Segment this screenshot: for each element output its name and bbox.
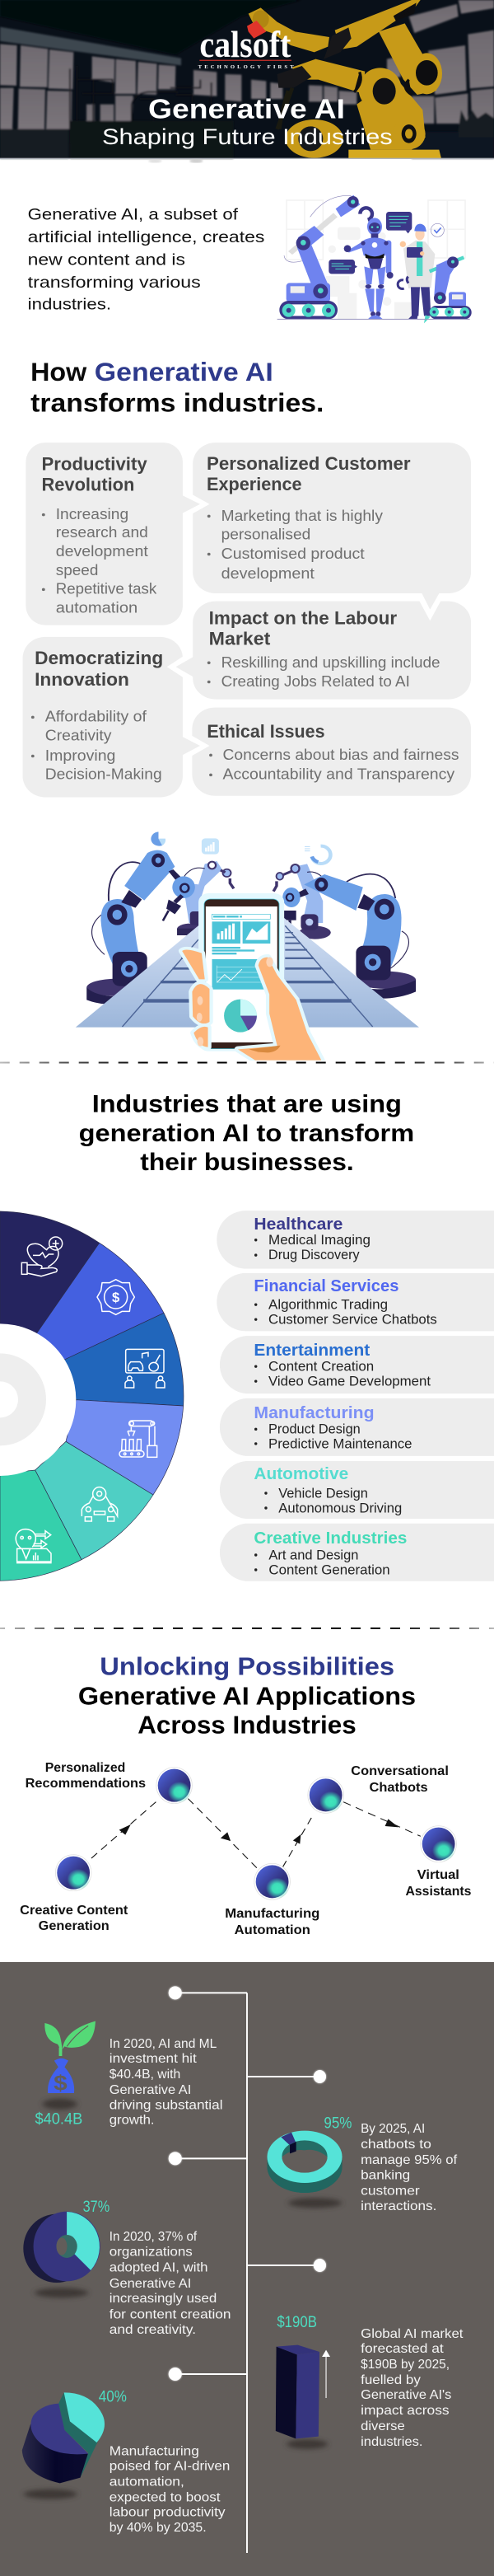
- stat: adoption 37%: In 2020, 37% of: [110, 2228, 197, 2244]
- panel: personalized customer experience: Customised product: [221, 546, 365, 563]
- section heading: [30, 358, 324, 417]
- panel: productivity revolution: development: [56, 543, 148, 560]
- stat: adoption 37%: [23, 2198, 231, 2337]
- stat: manufacturing 40%: 40%: [99, 2388, 127, 2405]
- card: entertainment: Entertainment: [254, 1342, 370, 1360]
- card: entertainment: Content Creation: [268, 1359, 374, 1375]
- card: entertainment: Video Game Development: [268, 1374, 431, 1389]
- stat: market 190B: fuelled by: [361, 2372, 421, 2387]
- card: automotive: Vehicle Design: [278, 1485, 368, 1501]
- factory windows background: [0, 0, 494, 158]
- section heading: industries: Industries that are using: [92, 1089, 402, 1117]
- node labels: Assistants: [405, 1885, 471, 1899]
- statistics timeline: [22, 1986, 464, 2553]
- dashed arrows: [91, 1799, 421, 1868]
- card: financial services: [217, 1273, 494, 1331]
- card: financial services: Financial Services: [254, 1277, 398, 1295]
- node labels: Automation: [235, 1923, 310, 1937]
- section heading: industries: generation AI to transform: [79, 1119, 414, 1146]
- panel: productivity revolution: speed: [56, 561, 98, 579]
- panel: personalized customer experience: Marketing that is highly: [221, 508, 383, 525]
- panel: impact on the labour market: [193, 592, 471, 700]
- intro text: artificial intelligence, creates: [28, 228, 264, 246]
- card: automotive: Automotive: [254, 1465, 348, 1483]
- floating chart icons: [151, 831, 330, 864]
- section heading: Generative AI: [95, 358, 273, 386]
- section heading: Generative AI Applications: [78, 1682, 416, 1711]
- left tank robot arm: [279, 195, 360, 319]
- panel: productivity revolution: Increasing: [56, 506, 128, 523]
- big left robot arm: [86, 850, 195, 1005]
- icon: heart in hand: [21, 1237, 63, 1276]
- card: financial services: Algorithmic Trading: [268, 1297, 388, 1313]
- speech bubbles: [329, 212, 412, 274]
- stat: chatbots 95%: chatbots to: [361, 2136, 431, 2152]
- stat: chatbots 95%: By 2025, AI: [361, 2120, 425, 2136]
- node labels: Recommendations: [26, 1777, 146, 1791]
- section heading: transforms industries.: [30, 388, 324, 417]
- node labels: [20, 1761, 471, 1937]
- stat: market 190B: forecasted at: [361, 2340, 444, 2356]
- card: creative industries: [220, 1524, 494, 1581]
- card: manufacturing: Manufacturing: [254, 1404, 375, 1422]
- stat: market 190B: [276, 2313, 464, 2449]
- panel: ethical issues: Accountability and Transparency: [223, 766, 454, 784]
- stat: market 190B: industries.: [361, 2433, 423, 2449]
- panel: democratizing innovation: Improving: [45, 747, 115, 765]
- icon: entertainment screen: [125, 1349, 165, 1388]
- panel: personalized customer experience: Personalized Customer: [207, 453, 411, 474]
- stat: adoption 37%: increasingly used: [110, 2290, 217, 2306]
- panel: productivity revolution: [26, 443, 183, 625]
- stat: adoption 37%: adopted AI, with: [110, 2260, 208, 2274]
- stat: manufacturing 40%: [22, 2388, 230, 2535]
- card: manufacturing: Predictive Maintenance: [268, 1436, 412, 1451]
- card: entertainment: [220, 1336, 494, 1393]
- card: healthcare: [217, 1211, 494, 1269]
- stat: adoption 37%: organizations: [110, 2244, 193, 2259]
- stat: manufacturing 40%: poised for AI-driven: [110, 2457, 230, 2473]
- panel: impact on the labour market: Impact on the Labour: [209, 607, 397, 628]
- icon: robot production line: [119, 1421, 157, 1457]
- stat: investment 40.4B: investment hit: [110, 2050, 197, 2066]
- stat: chatbots 95%: 95%: [324, 2115, 352, 2132]
- right tank robot arm: [430, 256, 472, 319]
- industry wheel: [0, 1211, 184, 1581]
- panel: democratizing innovation: Creativity: [45, 727, 112, 744]
- card: financial services: Customer Service Chatbots: [268, 1312, 437, 1328]
- stat: investment 40.4B: driving substantial: [110, 2096, 223, 2112]
- stat: manufacturing 40%: Manufacturing: [110, 2443, 199, 2458]
- big right robot arm: [282, 874, 416, 999]
- section: how generative AI transforms industries: [23, 358, 471, 797]
- intro text: transforming various: [28, 274, 201, 292]
- stat: investment 40.4B: In 2020, AI and ML: [110, 2035, 217, 2051]
- node labels: Creative Content: [20, 1904, 128, 1918]
- statistics panel background: [0, 1962, 494, 2576]
- stat: chatbots 95%: manage 95% of: [361, 2152, 457, 2167]
- stat: adoption 37%: for content creation: [110, 2306, 231, 2321]
- stat: chatbots 95%: customer: [361, 2182, 420, 2198]
- card: healthcare: Drug Discovery: [268, 1247, 360, 1262]
- calsoft logo: calsoft: [199, 23, 291, 65]
- section: generative AI applications: [20, 1652, 471, 1937]
- card: creative industries: Art and Design: [268, 1547, 358, 1562]
- section heading: Across Industries: [137, 1711, 357, 1740]
- panel: ethical issues: Ethical Issues: [207, 721, 325, 742]
- stat: chatbots 95%: [267, 2115, 457, 2213]
- stat: investment 40.4B: growth.: [110, 2112, 154, 2127]
- stat: adoption 37%: 37%: [83, 2198, 110, 2216]
- smartphone with dashboard: [198, 893, 284, 1051]
- back robot arms: [177, 861, 331, 939]
- panel: productivity revolution: automation: [56, 599, 137, 616]
- node labels: Conversational: [351, 1764, 449, 1778]
- engineer: [400, 223, 444, 323]
- stat: investment 40.4B: $40.4B: [35, 2110, 82, 2128]
- node: virtual assistants: [421, 1826, 456, 1862]
- node: conversational chatbots: [308, 1777, 343, 1813]
- card: manufacturing: [220, 1398, 494, 1456]
- calsoft logo: TECHNOLOGY FIRST: [198, 64, 294, 70]
- stat: chatbots 95%: interactions.: [361, 2198, 436, 2213]
- holding hand: [182, 949, 321, 1061]
- panel: impact on the labour market: Reskilling and upskilling include: [221, 654, 440, 672]
- panel: personalized customer experience: personalised: [221, 526, 310, 543]
- section heading: Unlocking Possibilities: [100, 1652, 394, 1681]
- stat: market 190B: $190B by 2025,: [361, 2356, 450, 2372]
- card: healthcare: Medical Imaging: [268, 1232, 370, 1248]
- factory and smartphone illustration: [0, 831, 494, 1175]
- panel: personalized customer experience: [181, 443, 471, 593]
- section heading: How: [30, 358, 87, 386]
- icon: dollar gear: $: [112, 1290, 120, 1305]
- robot and engineer illustration: [277, 195, 472, 323]
- icon: car and gear: [82, 1487, 118, 1521]
- stat: investment 40.4B: $: [54, 2071, 68, 2095]
- panel: personalized customer experience: development: [221, 565, 315, 583]
- panel: personalized customer experience: Experience: [207, 474, 302, 494]
- card: creative industries: Content Generation: [268, 1562, 390, 1577]
- panel: democratizing innovation: Innovation: [35, 669, 129, 690]
- panel: productivity revolution: Repetitive task: [56, 580, 156, 598]
- stat: manufacturing 40%: expected to boost: [110, 2489, 221, 2504]
- card: manufacturing: Product Design: [268, 1421, 361, 1436]
- stat: market 190B: impact across: [361, 2402, 450, 2418]
- stat: market 190B: Global AI market: [361, 2325, 464, 2341]
- card: creative industries: Creative Industries: [254, 1529, 407, 1548]
- stat: investment 40.4B: [35, 2021, 223, 2128]
- industry list cards: [217, 1211, 494, 1581]
- panel: productivity revolution: research and: [56, 524, 148, 541]
- intro text: industries.: [28, 296, 111, 313]
- stat: chatbots 95%: banking: [361, 2166, 410, 2182]
- node: creative content generation: [55, 1855, 91, 1891]
- panel: impact on the labour market: Creating Jobs Related to AI: [221, 672, 410, 691]
- node labels: Manufacturing: [225, 1907, 319, 1921]
- panel: democratizing innovation: Democratizing: [35, 648, 163, 668]
- card: automotive: Autonomous Driving: [278, 1500, 402, 1515]
- icon: dollar gear: [97, 1280, 134, 1314]
- panel: impact on the labour market: Market: [209, 628, 271, 649]
- intro text: new content and is: [28, 251, 185, 269]
- node labels: Chatbots: [369, 1781, 428, 1795]
- stat: manufacturing 40%: by 40% by 2035.: [110, 2519, 207, 2535]
- icon: creative bulb: [16, 1529, 52, 1563]
- stat: market 190B: $190B: [277, 2313, 317, 2331]
- humanoid robot: [344, 218, 394, 319]
- header title: [102, 94, 393, 149]
- stat: market 190B: Generative AI's: [361, 2386, 451, 2402]
- card: automotive: [220, 1461, 494, 1519]
- conveyor belt: [76, 917, 419, 1028]
- stat: investment 40.4B: Generative AI: [110, 2082, 191, 2097]
- intro text: [28, 206, 264, 313]
- panel: productivity revolution: Revolution: [42, 474, 134, 495]
- intro text: Generative AI, a subset of: [28, 206, 238, 223]
- stat: market 190B: diverse: [361, 2418, 405, 2433]
- node labels: Virtual: [417, 1868, 459, 1882]
- node labels: Personalized: [45, 1761, 125, 1775]
- header banner: [0, 0, 494, 163]
- section heading: industries: [79, 1089, 414, 1175]
- stat: manufacturing 40%: automation,: [110, 2473, 184, 2489]
- stat: adoption 37%: and creativity.: [110, 2321, 196, 2337]
- stat: adoption 37%: Generative AI: [110, 2275, 191, 2291]
- wheel segments: [0, 1211, 184, 1581]
- panel: ethical issues: Concerns about bias and fairness: [223, 746, 459, 764]
- stat: manufacturing 40%: labour productivity: [110, 2503, 226, 2519]
- panel: ethical issues: [192, 708, 471, 796]
- card: healthcare: Healthcare: [254, 1215, 343, 1234]
- stat: investment 40.4B: $40.4B, with: [110, 2066, 180, 2082]
- yellow robot arm: [249, 0, 442, 158]
- section heading: [78, 1652, 416, 1740]
- node: manufacturing automation: [254, 1863, 290, 1899]
- panel: democratizing innovation: Decision-Making: [45, 766, 162, 784]
- node: personalized recommendations: [156, 1768, 192, 1804]
- panel: democratizing innovation: Affordability of: [45, 708, 147, 726]
- panel: productivity revolution: Productivity: [42, 453, 147, 475]
- panel: democratizing innovation: [23, 637, 209, 797]
- header title: Shaping Future Industries: [102, 124, 393, 149]
- node labels: Generation: [39, 1919, 110, 1933]
- header title: Generative AI: [148, 94, 345, 124]
- section heading: industries: their businesses.: [140, 1148, 354, 1175]
